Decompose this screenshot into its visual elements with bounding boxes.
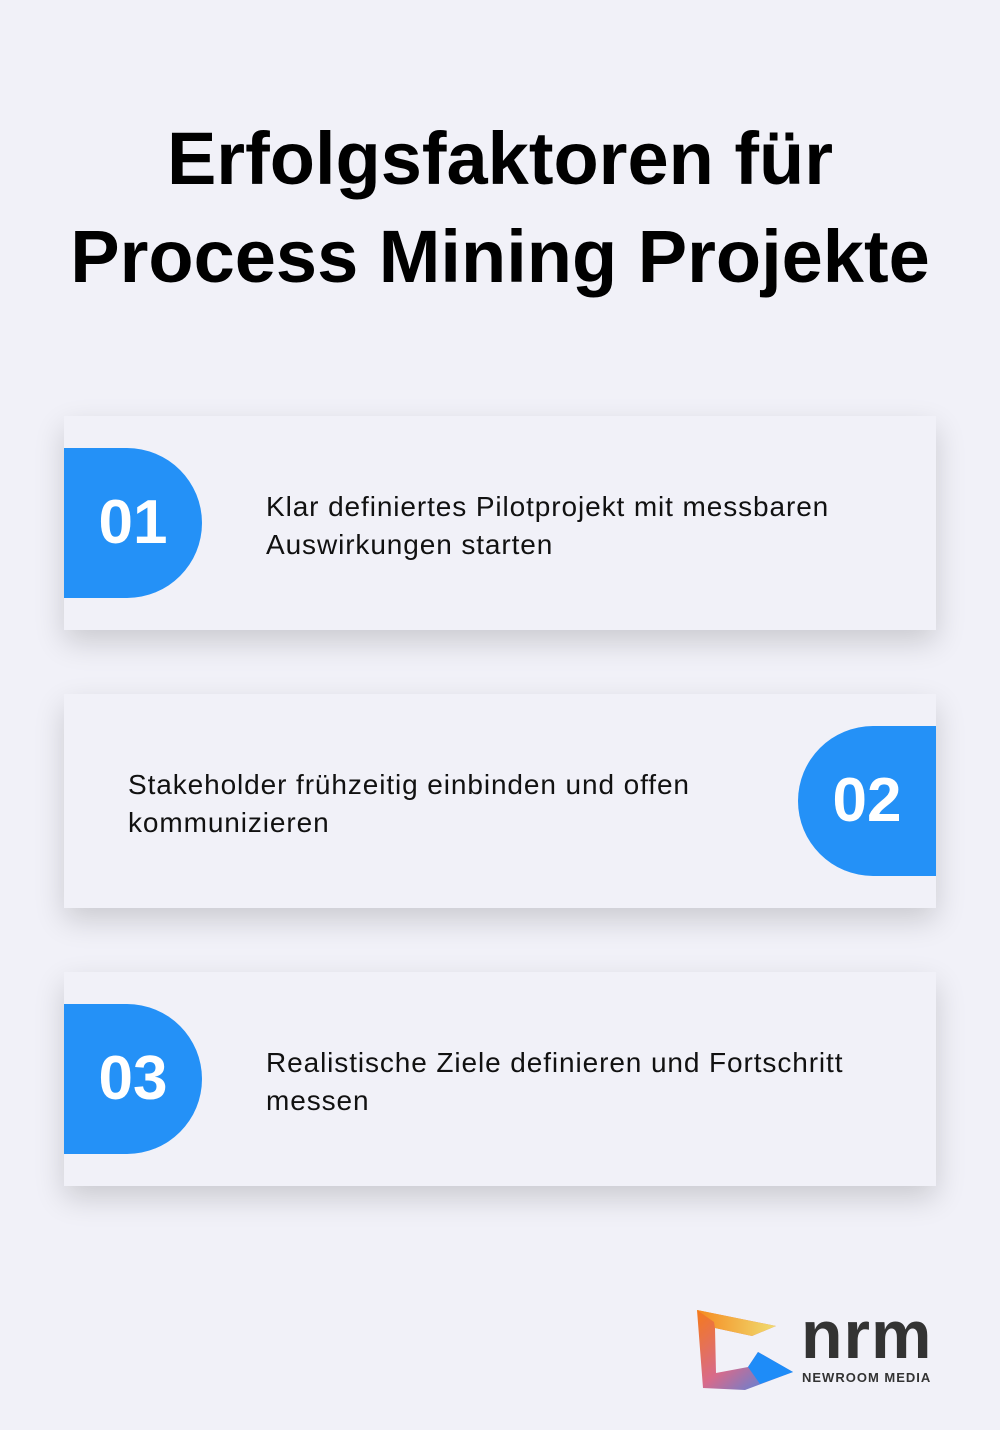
badge 01 (64, 448, 202, 598)
text 01: Klar definiertes Pilotprojekt mit messbaren Auswirkungen starten (266, 491, 829, 560)
logo (697, 1297, 932, 1390)
text 02: Stakeholder frühzeitig einbinden und offen kommunizieren (128, 769, 690, 838)
badge 01: 01 (99, 488, 167, 557)
card 01 (64, 416, 936, 630)
card 03 (64, 972, 936, 1186)
title (70, 117, 930, 298)
badge 02 (798, 726, 936, 876)
badge 03 (64, 1004, 202, 1154)
logo wordmark: nrm (801, 1297, 932, 1373)
logo subtitle: NEWROOM MEDIA (802, 1370, 931, 1385)
text 03: Realistische Ziele definieren und Fortschritt messen (266, 1047, 843, 1116)
badge 03: 03 (99, 1044, 167, 1113)
card 02 (64, 694, 936, 908)
title: Process Mining Projekte (70, 215, 930, 298)
logo icon (697, 1310, 793, 1390)
badge 02: 02 (833, 766, 901, 835)
title: Erfolgsfaktoren für (167, 117, 833, 200)
